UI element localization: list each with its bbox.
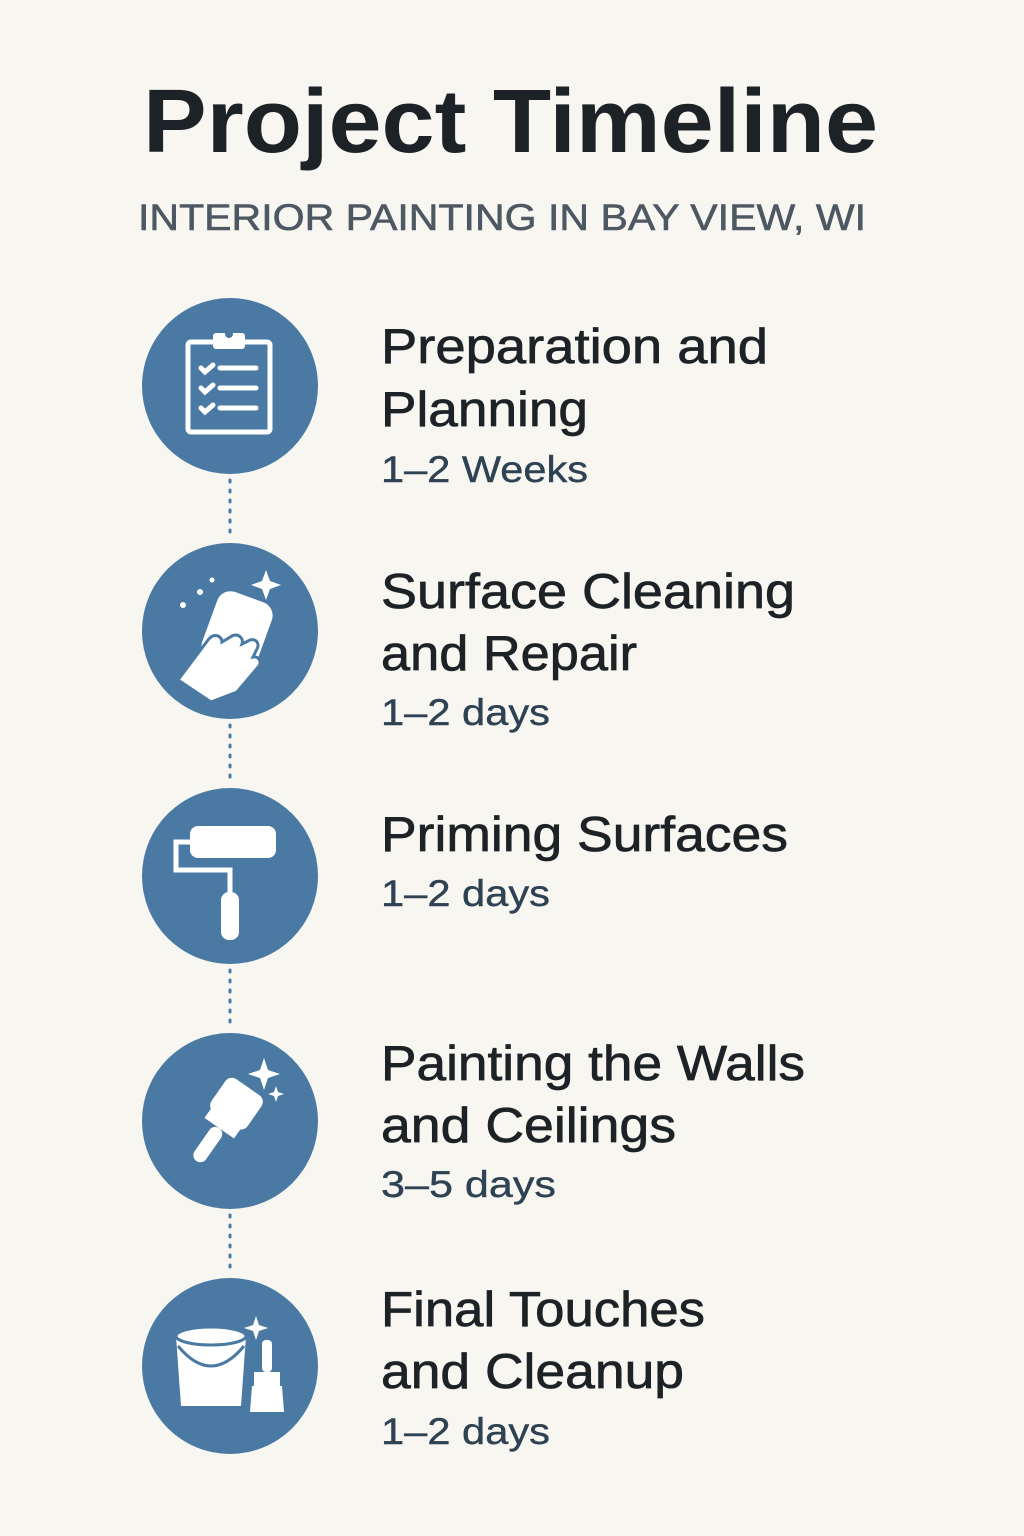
step 4: painting <box>142 1033 805 1209</box>
text: step 4: Painting the Walls <box>381 1037 805 1091</box>
text: step 2: Surface Cleaning <box>381 565 795 619</box>
step 2: cleaning <box>142 543 795 733</box>
text: step 5: and Cleanup <box>381 1345 684 1399</box>
icon: paint roller <box>142 788 318 964</box>
text: step 1: Planning <box>381 383 588 437</box>
text: step 5: Final Touches <box>381 1283 705 1337</box>
text: step 2: and Repair <box>381 627 637 681</box>
text: step 4: 3–5 days <box>381 1164 556 1205</box>
icon: clipboard <box>142 298 318 474</box>
connector dotted line <box>228 480 232 1275</box>
text: step 5: 1–2 days <box>381 1411 550 1452</box>
text: step 4: and Ceilings <box>381 1099 676 1153</box>
text: step 1: Preparation and <box>381 320 768 374</box>
icon: hand with sponge <box>142 543 318 719</box>
text: step 1 <box>381 320 768 490</box>
title: Project Timeline <box>143 72 878 172</box>
text: step 1: 1–2 Weeks <box>381 449 588 490</box>
icon: paint bucket and brush <box>142 1278 318 1454</box>
text: step 4 <box>381 1037 805 1205</box>
text: step 5 <box>381 1283 705 1452</box>
text: step 2 <box>381 565 795 733</box>
text: step 3: 1–2 days <box>381 873 550 914</box>
subtitle: INTERIOR PAINTING IN BAY VIEW, WI <box>138 197 866 238</box>
step 1: preparation <box>142 298 768 490</box>
step 5: cleanup <box>142 1278 705 1454</box>
icon: paint brush <box>142 1033 318 1209</box>
text: step 2: 1–2 days <box>381 692 550 733</box>
text: step 3 <box>381 808 788 914</box>
step 3: priming <box>142 788 788 964</box>
text: step 3: Priming Surfaces <box>381 808 788 862</box>
